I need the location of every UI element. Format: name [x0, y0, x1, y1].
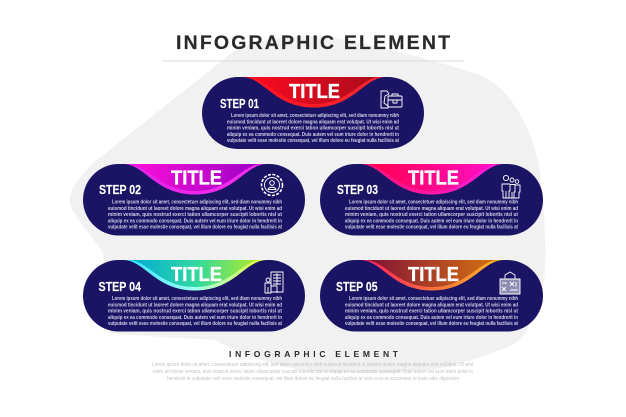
icon: building with map pattern — [500, 272, 520, 294]
body text: euismod tincidunt ut laoreet dolore magna aliquam erat volutpat. Ut wisi enim ad — [108, 302, 282, 308]
footer text: enim ad minim veniam, quis nostrud exerci tation ullamcorper suscipit lobortis nisl ut aliquip ex ea commodo consequat. Duis autem vel eum iriure dolor in — [153, 369, 473, 375]
body text: aliquip ex ea commodo consequat. Duis autem vel eum iriure dolor in hendrerit in — [345, 315, 518, 321]
body text: Lorem ipsum dolor sit amet, consectetuer adipiscing elit, sed diam nonummy nibh — [231, 113, 399, 119]
body text: aliquip ex ea commodo consequat. Duis autem vel eum iriure dolor in hendrerit in — [108, 315, 282, 321]
body text: minim veniam, quis nostrud exerci tation ullamcorper suscipit lobortis nisl ut — [108, 212, 282, 218]
heading: TITLE — [408, 168, 459, 190]
step label: STEP 05 — [336, 280, 378, 294]
body text: Lorem ipsum dolor sit amet, consectetuer adipiscing elit, sed diam nonummy nibh — [112, 200, 282, 206]
body text: Lorem ipsum dolor sit amet, consectetuer adipiscing elit, sed diam nonummy nibh — [349, 200, 518, 206]
step label: STEP 03 — [337, 183, 378, 197]
panel: step 02 — [83, 164, 305, 236]
body text: vulputate velit esse molestie consequat, vel illum dolore eu feugiat nulla facilisis at — [345, 225, 518, 231]
icon: briefcase and desk lamp — [381, 91, 402, 108]
body text — [227, 113, 399, 144]
heading: TITLE — [408, 264, 459, 286]
body text: Lorem ipsum dolor sit amet, consectetuer adipiscing elit, sed diam nonummy nibh — [349, 296, 518, 302]
body text: aliquip ex ea commodo consequat. Duis autem vel eum iriure dolor in hendrerit in — [345, 218, 518, 224]
footer text: hendrerit in vulputate velit esse molestie consequat, vel illum dolore eu feugiat nulla facilisis at vero eros et accumsan et iusto odio dignissim — [167, 376, 459, 382]
panel: step 03 — [320, 164, 543, 236]
body text: minim veniam, quis nostrud exerci tation ullamcorper suscipit lobortis nisl ut — [345, 309, 518, 315]
body text — [345, 200, 518, 231]
step label: STEP 02 — [99, 183, 141, 197]
background blob — [70, 36, 545, 373]
footer heading: INFOGRAPHIC ELEMENT — [229, 349, 399, 359]
panel: step 05 — [320, 260, 543, 332]
body text — [108, 296, 282, 327]
panel: step 01 — [202, 77, 424, 149]
body text — [345, 296, 518, 327]
footer text: Lorem ipsum dolor sit amet, consectetuer adipiscing elit, sed diam nonummy nibh euismod tincidunt ut laoreet dolore magna aliquam erat volutpat. Ut wisi — [152, 362, 473, 368]
step label: STEP 01 — [220, 97, 259, 111]
wave banner — [123, 260, 267, 290]
pill background — [320, 260, 543, 332]
icon: person at board — [265, 272, 283, 293]
body text — [108, 200, 282, 231]
heading: TITLE — [171, 168, 222, 190]
pill background — [202, 77, 424, 149]
body text: vulputate velit esse molestie consequat, vel illum dolore eu feugiat nulla facilisis at — [108, 225, 282, 231]
body text: euismod tincidunt ut laoreet dolore magna aliquam erat volutpat. Ut wisi enim ad — [227, 119, 399, 125]
icon: gear with person — [262, 174, 282, 196]
body text: euismod tincidunt ut laoreet dolore magna aliquam erat volutpat. Ut wisi enim ad — [345, 302, 518, 308]
wave banner — [360, 164, 504, 194]
body text: euismod tincidunt ut laoreet dolore magna aliquam erat volutpat. Ut wisi enim ad — [108, 206, 282, 212]
wave banner — [242, 77, 386, 108]
title: INFOGRAPHIC ELEMENT — [176, 32, 450, 54]
body text: Lorem ipsum dolor sit amet, consectetuer adipiscing elit, sed diam nonummy nibh — [112, 296, 282, 302]
step label: STEP 04 — [98, 280, 141, 294]
body text: minim veniam, quis nostrud exerci tation ullamcorper suscipit lobortis nisl ut — [227, 126, 399, 132]
pill background — [83, 164, 305, 236]
body text: minim veniam, quis nostrud exerci tation ullamcorper suscipit lobortis nisl ut — [108, 309, 282, 315]
body text: aliquip ex ea commodo consequat. Duis autem vel eum iriure dolor in hendrerit in — [108, 218, 282, 224]
panel: step 04 — [83, 260, 305, 332]
footer text — [152, 362, 473, 382]
body text: vulputate velit esse molestie consequat, vel illum dolore eu feugiat nulla facilisis at — [345, 321, 518, 327]
icon: group of people — [502, 175, 520, 198]
body text: vulputate velit esse molestie consequat, vel illum dolore eu feugiat nulla facilisis at — [108, 321, 282, 327]
wave banner — [360, 260, 504, 290]
body text: vulputate velit esse molestie consequat, vel illum dolore eu feugiat nulla facilisis at — [227, 138, 399, 144]
heading: TITLE — [289, 81, 340, 103]
body text: aliquip ex ea commodo consequat. Duis autem vel eum iriure dolor in hendrerit in — [227, 132, 399, 138]
pill background — [320, 164, 543, 236]
wave banner — [123, 164, 267, 194]
body text: euismod tincidunt ut laoreet dolore magna aliquam erat volutpat. Ut wisi enim ad — [345, 206, 518, 212]
body text: minim veniam, quis nostrud exerci tation ullamcorper suscipit lobortis nisl ut — [345, 212, 518, 218]
pill background — [83, 260, 305, 332]
heading: TITLE — [171, 264, 222, 286]
